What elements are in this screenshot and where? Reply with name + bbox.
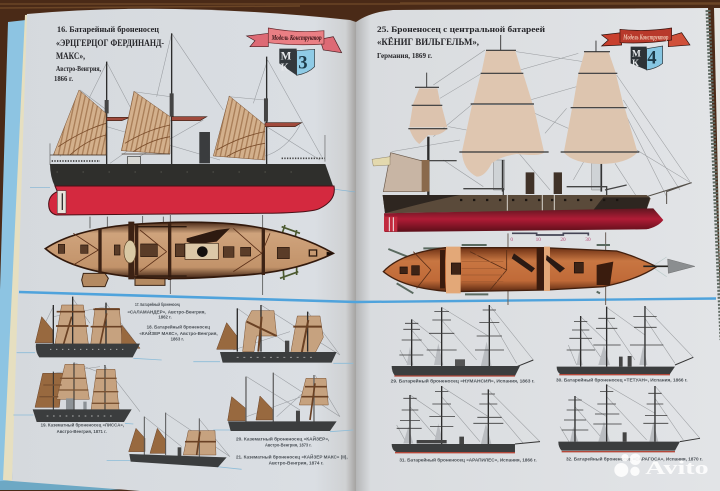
cream page edge bbox=[3, 14, 36, 481]
caption 17-18: 1863 г. bbox=[171, 336, 185, 342]
heading: ship 25: «КЁНИГ ВИЛЬГЕЛЬМ», bbox=[377, 35, 480, 48]
scale bar: 20 bbox=[560, 237, 566, 243]
heading: ship 16: 1866 г. bbox=[54, 75, 73, 83]
caption 20-21: 21. Казематный броненосец «КАЙЗЕР МАКС» (II), bbox=[236, 453, 348, 461]
caption 19 bbox=[41, 422, 125, 435]
badge: Модель Конструктор MK4: М bbox=[632, 50, 641, 60]
caption 30: 30. Батарейный броненосец «ТЕТУАН», Испания, 1866 г. bbox=[556, 377, 688, 384]
caption 32: 32. Батарейный броненосец «САРАГОСА», Испания, 1870 г. bbox=[566, 456, 703, 463]
scale bar: 10 bbox=[536, 237, 541, 243]
ship 20 bbox=[228, 373, 340, 431]
caption 17-18: 18. Батарейный броненосец bbox=[147, 324, 211, 331]
badge: Модель Конструктор MK4: К bbox=[632, 59, 639, 69]
ship 17 bbox=[35, 297, 140, 357]
caption 31: 31. Батарейный броненосец «АРАПИЛЕС», Испания, 1866 г. bbox=[399, 456, 537, 463]
caption 20-21: 20. Казематный броненосец «КАЙЗЕР», bbox=[236, 434, 330, 442]
right page bbox=[356, 8, 720, 491]
caption 17-18: 1862 г. bbox=[158, 315, 172, 321]
badge: Модель Конструктор MK3: К bbox=[281, 63, 289, 74]
heading: ship 25 bbox=[377, 24, 545, 60]
caption 17-18: 17. Батарейный броненосец bbox=[135, 301, 181, 308]
caption 19: 19. Казематный броненосец «ЛИССА», bbox=[41, 422, 125, 429]
caption 20-21: Австро-Венгрия, 1873 г. bbox=[265, 443, 312, 449]
scale bar: 0 bbox=[510, 237, 513, 243]
blue paper sheet under the book bbox=[0, 20, 26, 488]
deck plan: ship 16 bbox=[45, 215, 334, 295]
ship 32 bbox=[558, 384, 700, 452]
small ships, left page bbox=[13, 297, 353, 469]
right page block edge bbox=[708, 8, 720, 340]
blue strip at the bottom of the book bbox=[0, 480, 140, 490]
scale bar: 30 bbox=[585, 237, 591, 243]
heading: ship 25: 25. Броненосец с центральной батареей bbox=[377, 24, 545, 34]
caption 19: Австро-Венгрия, 1871 г. bbox=[57, 429, 107, 435]
caption 17-18: «КАЙЗЕР МАКС», Австро-Венгрия, bbox=[139, 329, 218, 337]
blue divider lines bbox=[19, 292, 716, 302]
ship 29 bbox=[392, 305, 533, 376]
ship 30 bbox=[557, 306, 693, 375]
ship 18 bbox=[217, 305, 340, 363]
heading: ship 25: Германия, 1869 г. bbox=[377, 52, 432, 60]
heading: ship 16: «ЭРЦГЕРЦОГ ФЕРДИНАНД- bbox=[56, 39, 164, 49]
badge: Модель Конструктор MK4: Модель Конструктор bbox=[623, 32, 669, 41]
light water lines bbox=[13, 353, 353, 469]
badge: Модель Конструктор MK4: 4 bbox=[647, 47, 657, 68]
badge: Модель Конструктор MK3 bbox=[247, 28, 342, 75]
heading: ship 16: Австро-Венгрия, bbox=[56, 65, 101, 73]
main ship: Erzherzog Ferdinand Max bbox=[30, 33, 355, 215]
badge: Модель Конструктор MK3: М bbox=[281, 50, 292, 62]
main ship: König Wilhelm bbox=[372, 35, 692, 232]
Avito watermark bbox=[614, 454, 709, 479]
scale bar bbox=[510, 233, 591, 243]
caption 29: 29. Батарейный броненосец «НУМАНСИЯ», Испания, 1863 г. bbox=[391, 377, 535, 384]
ship 21 bbox=[129, 413, 230, 467]
badge: Модель Конструктор MK3: Модель Конструктор bbox=[271, 33, 322, 42]
ship 19 bbox=[33, 363, 140, 422]
caption 20-21 bbox=[236, 434, 348, 466]
heading: ship 16: 16. Батарейный броненосец bbox=[57, 24, 159, 34]
heading: ship 16: МАКС», bbox=[56, 52, 85, 62]
ship 31 bbox=[392, 386, 540, 453]
badge: Модель Конструктор MK3: 3 bbox=[298, 53, 308, 74]
heading: ship 16 bbox=[54, 24, 164, 83]
badge: Модель Конструктор MK4 bbox=[602, 28, 690, 70]
caption 17-18 bbox=[127, 301, 218, 342]
Avito watermark: Avito bbox=[645, 458, 709, 479]
caption 20-21: Австро-Венгрия, 1874 г. bbox=[269, 460, 324, 466]
left page bbox=[12, 9, 356, 491]
caption 17-18: «САЛАМАНДЕР», Австро-Венгрия, bbox=[127, 309, 206, 315]
deck plan: ship 25 bbox=[383, 232, 695, 305]
small ships, right page bbox=[391, 305, 709, 479]
